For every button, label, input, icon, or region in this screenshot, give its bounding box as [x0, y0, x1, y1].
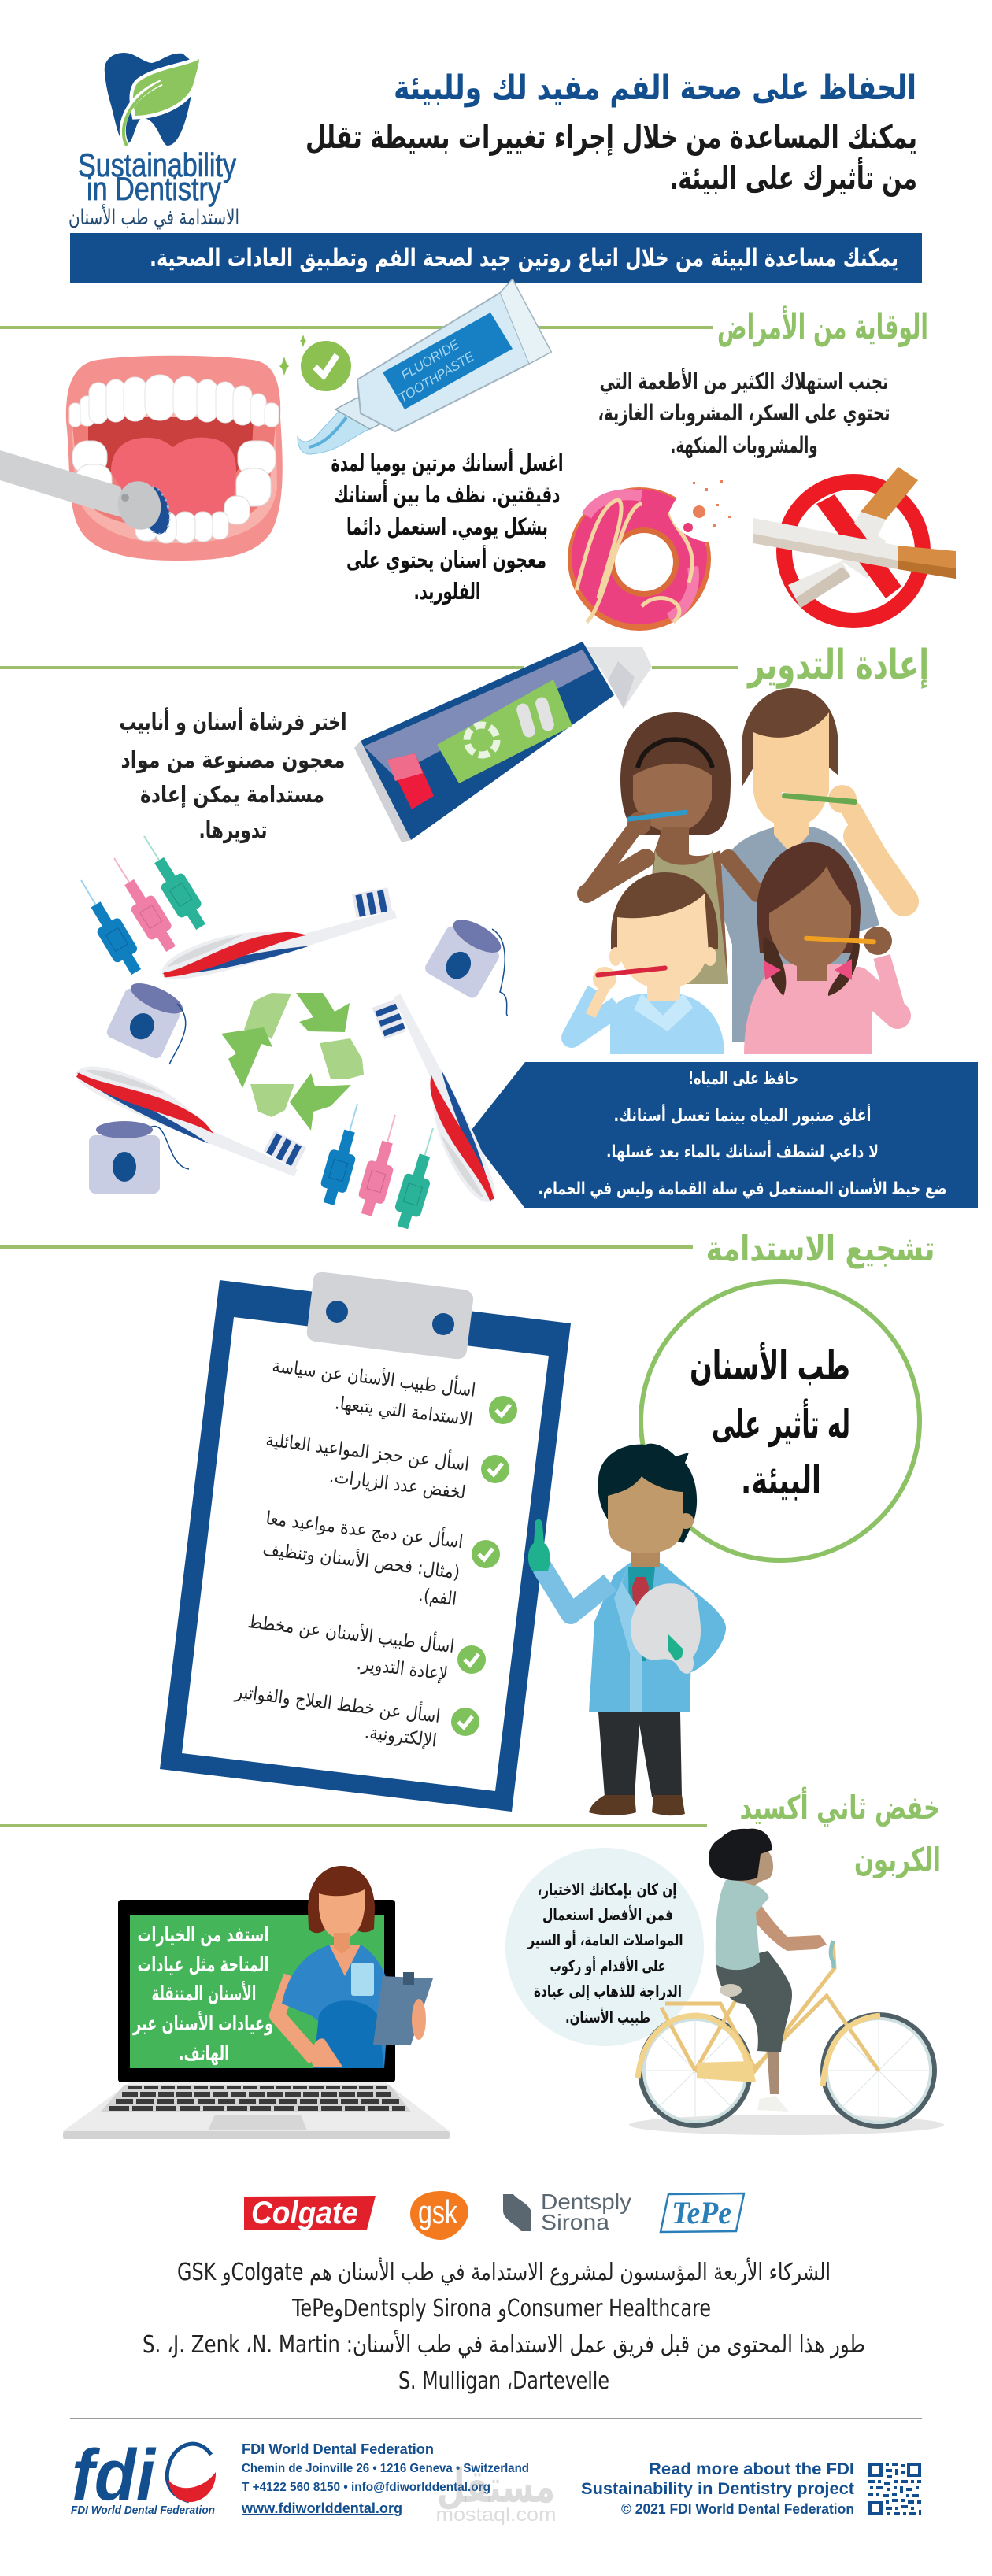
icon: toothbrush top	[154, 886, 401, 983]
logo wordmark	[68, 146, 239, 230]
footer: contact details	[241, 2441, 529, 2516]
illustration: dentist with tooth model	[528, 1444, 726, 1815]
banner	[70, 233, 922, 283]
lower teeth	[72, 441, 276, 543]
checklist clipboard	[160, 1272, 571, 1812]
icon: dental floss top right	[423, 912, 509, 1016]
footer: read more	[581, 2460, 854, 2517]
intro text	[305, 118, 917, 197]
icon: bitten donut	[568, 480, 731, 631]
partner logos	[244, 2189, 744, 2240]
heading: reduce carbon dioxide	[0, 1786, 941, 1878]
text: transport advice: طبيب الأسنان.	[565, 2007, 650, 2026]
checklist text: لإعادة التدوير.	[356, 1653, 449, 1685]
laptop text: استفد من الخيارات	[137, 1923, 269, 1947]
icon: toothbrush vertical	[371, 986, 500, 1216]
laptop text: الأسنان المتنقلة	[151, 1981, 257, 2006]
logo wordmark: الاستدامة في طب الأسنان	[68, 203, 239, 230]
text: brushing advice: اغسل أسنانك مرتين يوميا لمدة	[331, 448, 564, 476]
text: transport advice: المواصلات العامة، أو السير	[527, 1929, 683, 1949]
logo: GSK: gsk	[418, 2193, 458, 2230]
laptop text: وعيادات الأسنان عبر	[132, 2011, 273, 2036]
speech bubble: dentistry impacts environment: طب الأسنان	[690, 1342, 850, 1389]
logo: FDI: fdi	[72, 2435, 157, 2515]
text: brushing advice	[331, 448, 564, 605]
heading: recycling	[0, 642, 929, 689]
checklist text: (مثال: فحص الأسنان وتنظيف	[261, 1538, 461, 1583]
icon: dental floss bottom	[89, 1121, 189, 1194]
checklist text: لخفض عدد الزيارات.	[328, 1467, 467, 1504]
logo: FDI	[71, 2435, 216, 2517]
logo: Dentsply Sirona: Sirona	[541, 2210, 609, 2234]
watermark: مستقل	[437, 2459, 555, 2513]
girl	[744, 842, 898, 1054]
footer: read more: © 2021 FDI World Dental Federation	[621, 2501, 854, 2517]
speech bubble: transport advice	[505, 1848, 704, 2046]
icon: no smoking	[753, 467, 956, 620]
icon: dental floss left	[105, 976, 187, 1064]
text: choose recyclable products: تدويرها.	[198, 816, 268, 843]
logo: Dentsply Sirona	[503, 2189, 631, 2234]
text: brushing advice: دقيقتين. نظف ما بين أسنانك	[334, 479, 561, 508]
heading: disease prevention	[0, 305, 928, 347]
text: avoid sugar: والمشروبات المنكهة.	[671, 432, 817, 458]
heading: encourage sustainability	[0, 1229, 935, 1269]
credits text: Dartevelle‏،‏ S. Mulligan‎	[398, 2367, 609, 2395]
icon: fluoride toothpaste: TOOTHPASTE	[396, 349, 477, 405]
illustration: woman on bicycle	[629, 1829, 944, 2135]
credits text: الشركاء الأربعة المؤسسون لمشروع الاستدامة في طب الأسنان هم Colgateو GSK	[177, 2256, 831, 2286]
text: avoid sugar	[598, 368, 890, 458]
logo: Sustainability in Dentistry	[68, 53, 239, 230]
logo: TePe: TePe	[672, 2195, 731, 2230]
checklist text	[233, 1353, 477, 1752]
icon: recycling arrows	[221, 993, 364, 1131]
mother	[587, 712, 757, 984]
father	[715, 688, 904, 1042]
checklist text: الاستدامة التي يتبعها.	[334, 1393, 474, 1430]
footer: contact details: FDI World Dental Federation	[242, 2441, 434, 2457]
laptop text: المتاحة مثل عيادات	[137, 1953, 269, 1977]
text: transport advice: على الأقدام أو ركوب	[550, 1955, 666, 1975]
rider	[709, 1829, 827, 2112]
checklist text: الإلكترونية.	[364, 1723, 438, 1752]
nurse	[277, 1866, 433, 2068]
credits text: طور هذا المحتوى من قبل فريق عمل الاستدامة في طب الأسنان: N. Martin‏،‏ J. Zenk‏،‏ S.‎	[143, 2329, 865, 2359]
logo: Dentsply Sirona: Dentsply	[541, 2189, 631, 2214]
speech bubble: dentistry impacts environment	[641, 1282, 920, 1560]
watermark	[436, 2459, 556, 2526]
icon: recyclable toothpaste tube	[354, 642, 652, 842]
clip	[307, 1272, 473, 1359]
logo wordmark: in Dentistry	[87, 170, 221, 207]
laptop base	[63, 2082, 450, 2139]
checklist text: اسأل عن حجز المواعيد العائلية	[265, 1427, 471, 1475]
checklist text: اسأل طبيب الأسنان عن مخطط	[246, 1608, 456, 1657]
icon group: interdental brushes bottom	[316, 1100, 446, 1231]
icon: toothbrush lower	[72, 1035, 309, 1194]
icon group: interdental brushes top	[69, 829, 212, 979]
credits text	[143, 2256, 865, 2395]
illustration: open mouth and electric brush	[0, 356, 283, 561]
speech bubble: dentistry impacts environment: له تأثير على	[712, 1398, 850, 1448]
text: transport advice: فمن الأفضل استعمال	[542, 1904, 673, 1924]
callout: save water	[468, 1062, 978, 1208]
icon: fluoride toothpaste	[298, 279, 551, 454]
footer: contact details: T +4122 560 8150 • info@fdiworlddental.org	[242, 2481, 490, 2494]
footer: contact details: www.fdiworlddental.org	[241, 2500, 402, 2516]
bicycle	[638, 1941, 935, 2126]
text: choose recyclable products	[120, 707, 346, 843]
checklist text: اسأل عن خطط العلاج والفواتير	[233, 1678, 442, 1727]
callout: save water: أغلق صنبور المياه بينما تغسل أسنانك.	[614, 1103, 871, 1126]
text: transport advice: إن كان بإمكانك الاختيار،	[537, 1880, 677, 1899]
icon: fluoride toothpaste: FLUORIDE	[398, 337, 462, 383]
text: brushing advice: الفلوريد.	[414, 578, 480, 605]
icon: tooth with leaf	[105, 53, 199, 146]
text: brushing advice: بشكل يومي. استعمل دائما	[346, 513, 548, 540]
logo: FDI: FDI World Dental Federation	[71, 2504, 215, 2517]
laptop screen	[118, 1900, 395, 2082]
footer: read more: Sustainability in Dentistry project	[581, 2480, 854, 2498]
logo: TePe	[661, 2193, 744, 2232]
checklist text: اسأل عن دمج عدة مواعيد معا	[265, 1505, 465, 1553]
laptop text: الهاتف.	[179, 2042, 229, 2066]
heading: encourage sustainability: تشجيع الاستدامة	[705, 1229, 935, 1269]
text: brushing advice: معجون أسنان يحتوي على	[346, 545, 546, 573]
logo: Colgate: Colgate	[251, 2196, 358, 2230]
logo wordmark: Sustainability	[78, 146, 236, 183]
illustration: laptop with teledentistry	[63, 1866, 450, 2139]
credits text: Consumer Healthcareو Dentsply SironaوTePe	[291, 2295, 711, 2322]
icon: green check	[279, 335, 351, 391]
text: choose recyclable products: اختر فرشاة أسنان و أنابيب	[120, 707, 346, 735]
footer: contact details: Chemin de Joinville 26 • 1216 Geneva • Switzerland	[242, 2462, 529, 2475]
upper teeth	[69, 375, 279, 427]
callout: save water: حافظ على المياه!	[688, 1069, 798, 1089]
text: choose recyclable products: معجون مصنوعة من مواد	[121, 746, 345, 773]
electric toothbrush	[0, 450, 174, 537]
text: transport advice: الدراجة للذهاب إلى عيادة	[534, 1982, 682, 2000]
logo: GSK	[410, 2191, 468, 2240]
checklist text: اسأل طبيب الأسنان عن سياسة	[271, 1353, 477, 1401]
check icons	[451, 1396, 517, 1736]
heading: reduce carbon dioxide: الكربون	[854, 1841, 941, 1878]
boy	[572, 872, 724, 1054]
callout: save water: لا داعي لشطف أسنانك بالماء بعد غسلها.	[606, 1139, 879, 1162]
footer: read more: Read more about the FDI	[649, 2460, 854, 2478]
speech bubble: dentistry impacts environment: البيئة.	[741, 1457, 821, 1503]
illustration: family brushing teeth	[572, 688, 904, 1054]
laptop text	[132, 1923, 273, 2066]
checklist text: الفم).	[417, 1585, 457, 1610]
QR code	[868, 2463, 921, 2515]
watermark: mostaql.com	[436, 2504, 556, 2526]
text: choose recyclable products: مستدامة يمكن إعادة	[140, 781, 324, 809]
text: transport advice	[527, 1880, 683, 2026]
